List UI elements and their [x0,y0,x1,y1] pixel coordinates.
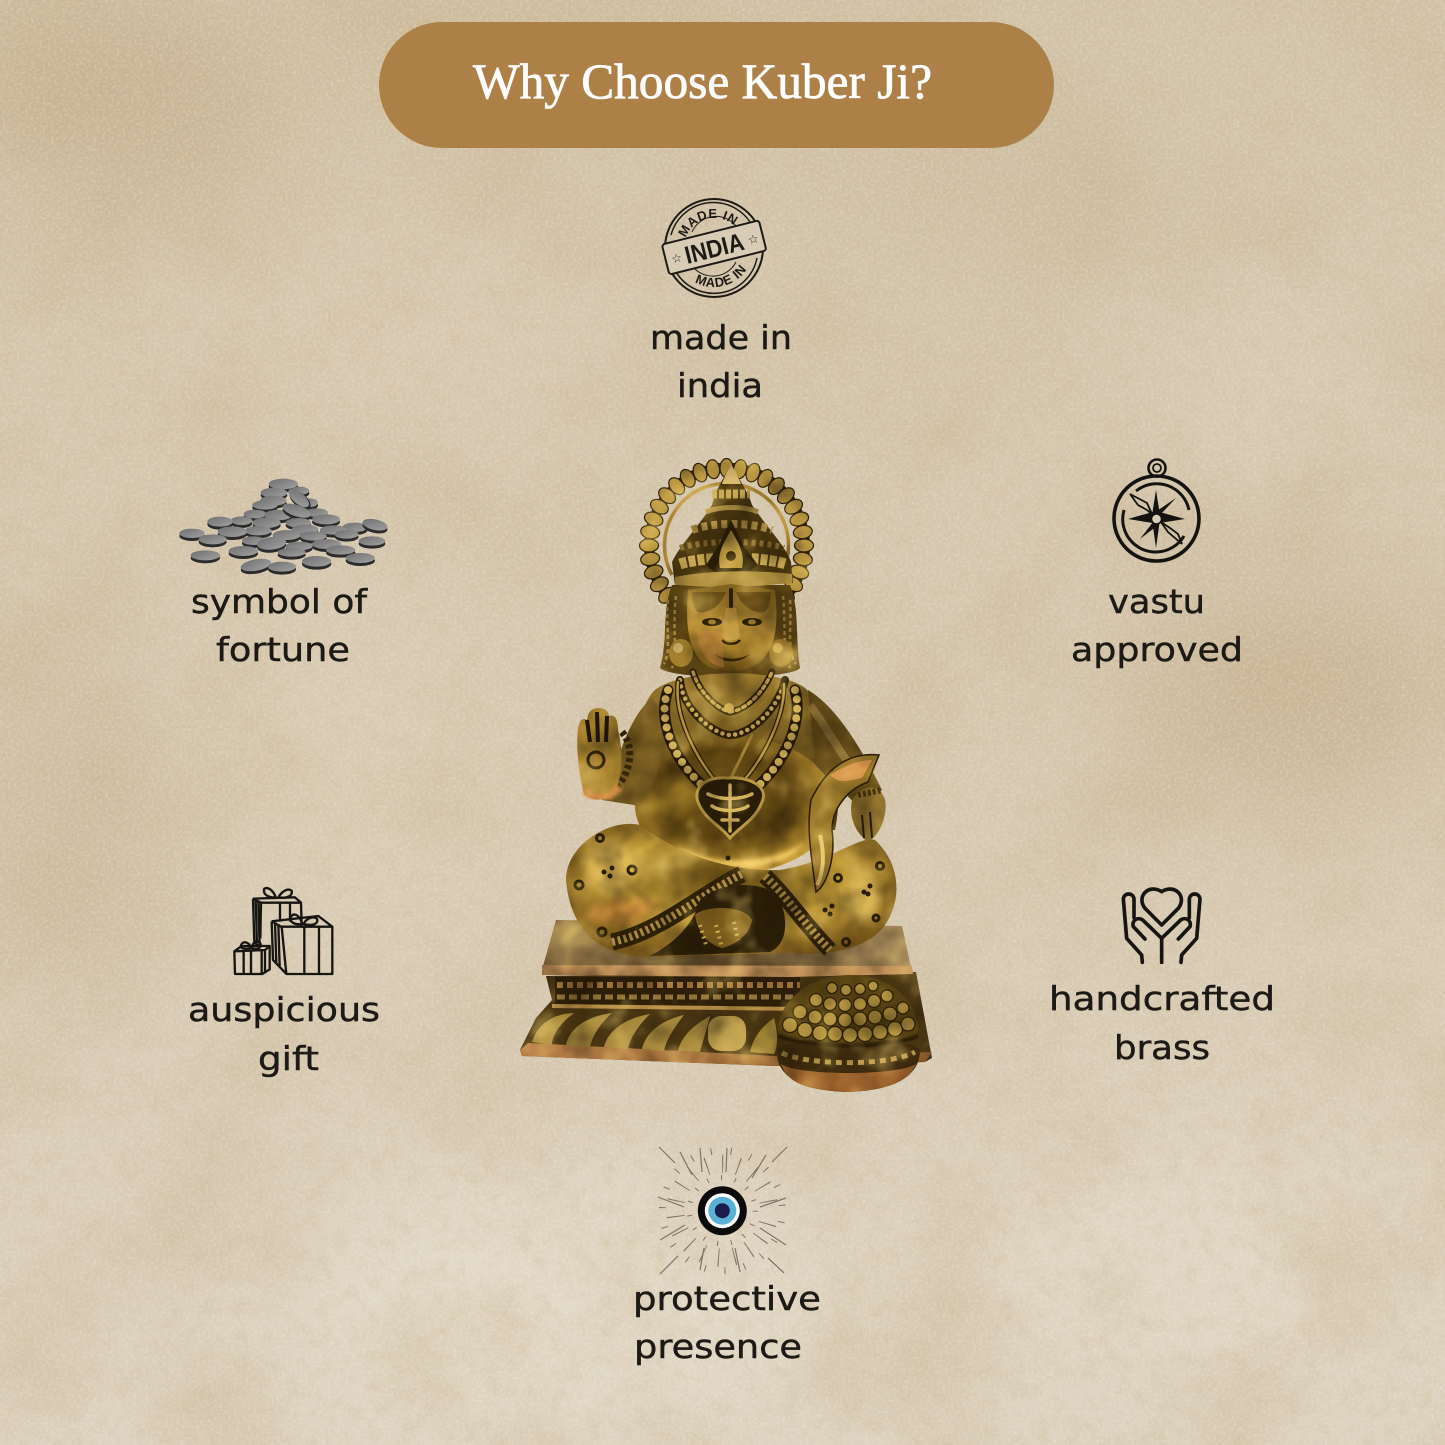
title pill [379,22,1054,148]
base [520,972,932,1066]
dhoti bands [612,874,742,942]
pendant [697,778,764,838]
label: vastu approved: approved [1071,630,1243,669]
label: auspicious gift [188,990,380,1078]
icon: gift boxes [234,888,332,974]
earrings [669,639,793,667]
label: protective presence: protective [633,1279,821,1318]
icon: made in india stamp: INDIA [682,228,747,270]
icon: hands holding heart [1123,889,1200,962]
label: handcrafted brass: handcrafted [1049,979,1275,1018]
label: vastu approved: vastu [1108,582,1205,621]
icon: made in india stamp: ☆ [746,231,760,247]
icon: made in india stamp: MADE IN [678,209,738,237]
label: symbol of fortune: fortune [216,630,350,669]
right arm [808,690,882,808]
raised palm [577,708,622,800]
label: auspicious gift: gift [258,1039,319,1078]
face [687,584,776,671]
icon: compass [1114,460,1199,561]
label: made in india: made in [650,318,792,357]
title text: Why Choose Kuber Ji? [473,53,932,109]
icon: pile of coins [179,479,389,576]
belly [635,737,835,873]
lidded pot of treasure [777,975,920,1092]
label: made in india [650,318,792,405]
icon: made in india stamp: ☆ [670,250,684,266]
label: protective presence [633,1279,821,1366]
label: handcrafted brass: brass [1114,1028,1210,1067]
crossed legs [566,824,896,957]
label: handcrafted brass [1049,979,1275,1067]
feet [695,908,752,948]
halo [640,458,814,606]
dhoti motifs [575,834,884,946]
label: auspicious gift: auspicious [188,990,380,1029]
label: made in india: india [677,366,763,405]
top plate [542,920,913,977]
raised left arm [602,698,664,806]
label: symbol of fortune: symbol of [191,582,368,621]
icon: evil eye with rays [658,1147,787,1274]
label: symbol of fortune [191,582,368,669]
icon: made in india stamp: MADE IN [696,264,746,288]
necklaces [665,672,797,838]
icon: made in india stamp [662,198,767,298]
label: vastu approved [1071,582,1243,669]
statue of Kuber [520,458,932,1092]
label: protective presence: presence [634,1327,802,1366]
crown [672,465,793,588]
hair [660,585,800,677]
mongoose and right hand [809,755,886,892]
torso [634,673,839,830]
